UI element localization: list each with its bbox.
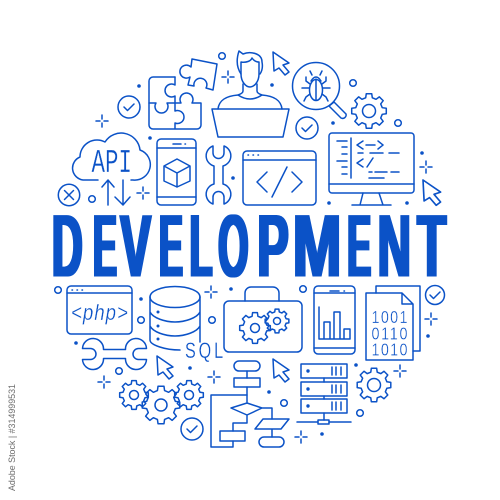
decorative small circles [55, 53, 401, 416]
title [52, 196, 446, 297]
icon: php browser [67, 286, 132, 334]
icon: check circle right [426, 286, 444, 304]
title: T [417, 197, 446, 296]
icon: code monitor [329, 133, 414, 205]
text: API: API [92, 146, 132, 183]
title: N [378, 196, 411, 295]
icon: API cloud [73, 133, 150, 205]
icon: cursor right [423, 180, 441, 205]
icon: check circle left [118, 96, 140, 118]
icon: flowchart [211, 361, 289, 447]
title: V [120, 197, 151, 297]
title: O [218, 196, 248, 296]
icon: bug magnifier [292, 62, 346, 118]
icon: code browser [243, 151, 316, 205]
icon: gear bottom right [357, 368, 391, 402]
icon: tilted puzzle piece [180, 59, 217, 90]
icon: vertical wrench [206, 146, 231, 204]
icon: close circle [58, 184, 80, 206]
icon: binary document [366, 286, 420, 360]
title: D [52, 196, 83, 296]
icon: horizontal wrench [82, 338, 146, 370]
text: binary row 3: 1010 [372, 340, 408, 360]
title: E [347, 198, 371, 296]
icon: check circle centre [296, 117, 318, 139]
icon: three gears [120, 381, 203, 424]
icon: server rack [297, 364, 351, 424]
title: P [257, 198, 289, 297]
text: binary row 1: 1001 [372, 308, 408, 327]
icon: phone with cube [157, 139, 196, 205]
icon: database with SQL [150, 286, 223, 364]
title: M [293, 196, 341, 295]
title: E [159, 198, 183, 296]
icon: check circle bottom [181, 418, 203, 440]
watermark: Adobe Stock | #314999531 [7, 384, 18, 491]
icon: puzzle [149, 77, 201, 129]
icon: gear top right [352, 94, 386, 128]
text: php tag: <php> [71, 302, 128, 325]
icon: phone with bar chart [314, 286, 355, 354]
decorative dots [74, 83, 430, 436]
icon: cursor left [157, 356, 173, 379]
icon: cursor bottom [273, 359, 289, 382]
icon: toolbox with gears [224, 287, 302, 352]
title: E [93, 198, 117, 296]
icon: cursor top [273, 52, 289, 75]
title: L [190, 197, 212, 296]
text: binary row 2: 0110 [372, 324, 408, 344]
decorative sparkles [96, 71, 437, 443]
text: SQL: SQL [185, 338, 223, 364]
icon: developer at laptop [212, 51, 289, 137]
